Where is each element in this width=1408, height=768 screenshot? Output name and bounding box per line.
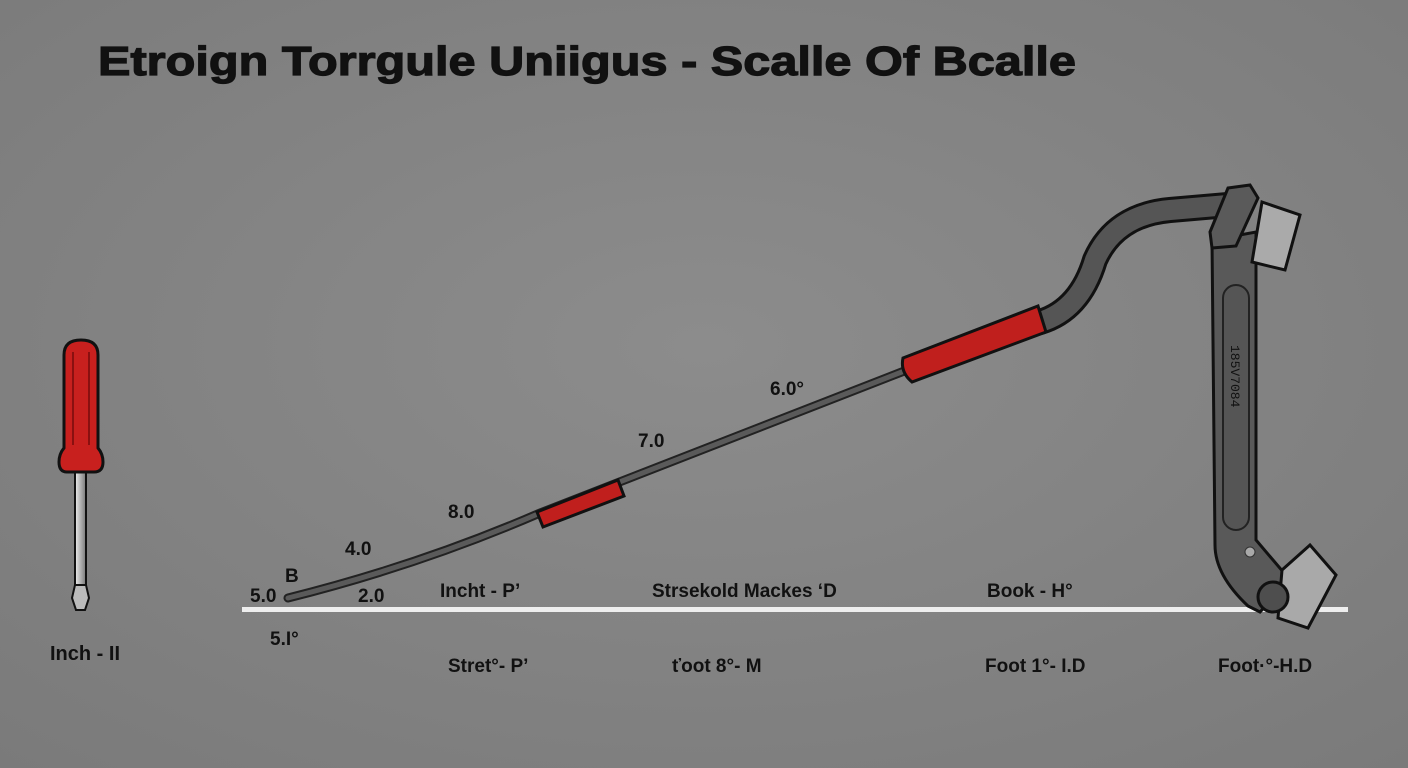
torque wrench [288,185,1336,628]
scale labels: ťoot 8°- M [672,656,762,677]
title: Etroign Torrgule Uniigus - Scalle Of Bcalle [98,38,1076,84]
scale labels: Foot 1°- I.D [985,656,1085,677]
scale labels: Strsekold Mackes ‘D [652,581,837,602]
scale labels: B [285,566,299,587]
bottom head [1278,545,1336,628]
scale labels [250,379,1312,677]
scale labels: 2.0 [358,586,384,607]
rod [288,368,912,598]
scale labels: 5.I° [270,629,299,650]
scale labels: 8.0 [448,502,474,523]
top head [1210,185,1258,248]
vertical arm [1212,232,1290,612]
scale labels: Stret°- P’ [448,656,528,677]
upper shaft bend [1040,205,1228,322]
scale labels: 6.0° [770,379,804,400]
small grip [537,480,624,527]
scale labels: Book - H° [987,581,1073,602]
baseline [242,607,1348,612]
big grip [902,306,1046,382]
scale labels: 4.0 [345,539,371,560]
scale labels: Incht - P’ [440,581,520,602]
scale labels: Foot·°-H.D [1218,656,1312,677]
icon: screwdriver [59,340,103,610]
scale labels: 7.0 [638,431,664,452]
scale labels: 5.0 [250,586,276,607]
torque wrench: 185V7084 [1227,345,1242,408]
label: screwdriver: Inch - II [50,643,120,665]
